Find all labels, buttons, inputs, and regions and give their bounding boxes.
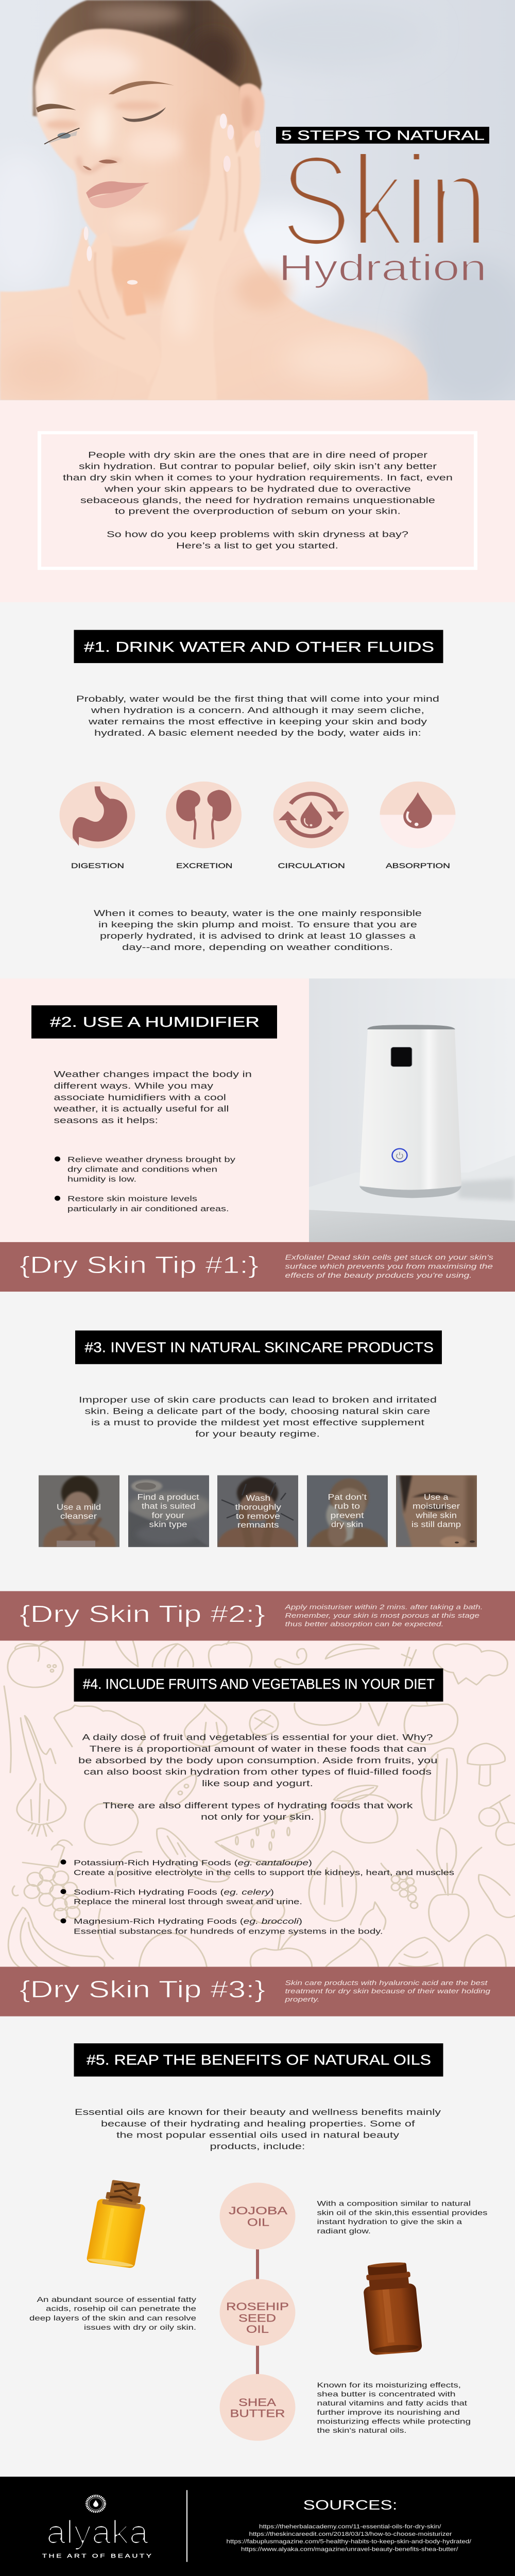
neck and shoulders <box>0 229 428 400</box>
card: find a product: for your <box>151 1511 185 1520</box>
circle: jojoba oil <box>219 2183 296 2249</box>
text: shea description: Known for its moisturizing effects, <box>317 2381 461 2389</box>
text: water intro: Probably, water would be the first thing that will come into your mind <box>76 694 439 704</box>
card: pat don't rub: Pat don’t <box>328 1493 367 1502</box>
intro text: So how do you keep problems with skin dryness at bay? <box>107 530 408 539</box>
hair <box>31 0 263 117</box>
text: jojoba description <box>317 2199 487 2235</box>
callout: dry skin tip 1: {Dry Skin Tip #1:} <box>20 1251 259 1278</box>
intro text: sebaceous glands, the need for hydration remains unquestionable <box>80 496 435 505</box>
text: daily dose <box>78 1733 438 1822</box>
text: daily dose: A daily dose of fruit and vegetables is essential for your diet. Why? <box>82 1733 433 1742</box>
card: use a moisturiser: while skin <box>415 1511 457 1520</box>
card: find a product: that is suited <box>142 1502 196 1511</box>
sources heading: SOURCES: <box>303 2497 398 2512</box>
text: rosehip description: issues with dry or oily skin. <box>84 2324 196 2332</box>
list: humidifier benefits: Restore skin moisture levels <box>67 1195 197 1203</box>
lips <box>86 181 149 198</box>
text: improper use <box>79 1395 437 1438</box>
circle: shea butter <box>219 2374 296 2441</box>
icon: digestion stomach <box>60 782 135 849</box>
circle: jojoba oil: JOJOBA <box>229 2205 288 2216</box>
text: rosehip description: deep layers of the skin and can resolve <box>29 2314 196 2323</box>
text: jojoba description: radiant glow. <box>317 2227 371 2235</box>
intro text: when your skin appears to be hydrated due to overactive <box>104 484 411 494</box>
text: essential oils: the most popular essential oils used in natural beauty <box>116 2130 399 2140</box>
text: water and beauty: properly hydrated, it is advised to drink at least 10 glasses a <box>100 931 416 941</box>
circle: shea butter: SHEA <box>238 2396 277 2409</box>
text: daily dose: There are also different types of hydrating foods that work <box>102 1801 413 1810</box>
text: weather changes: associate humidifiers with a cool <box>54 1093 226 1102</box>
callout: dry skin tip 3 <box>0 1967 515 2016</box>
circle: rosehip seed oil <box>219 2279 296 2346</box>
text: weather changes: different ways. While you may <box>54 1081 213 1091</box>
card: pat don't rub <box>307 1475 388 1547</box>
text: water intro: hydrated. A basic element needed by the body, water aids in: <box>94 728 421 738</box>
ear <box>239 82 266 143</box>
text: weather changes <box>53 1070 252 1125</box>
label: excretion: EXCRETION <box>176 862 233 870</box>
icon: absorption <box>380 782 455 849</box>
text: improper use: is a must to provide the mildest yet most effective supplement <box>91 1417 424 1427</box>
text: daily dose: be absorbed by the body upon consumption. Aside from fruits, you <box>78 1755 438 1765</box>
text: daily dose: can also boost skin hydration from other types of fluid-filled foods <box>83 1767 432 1776</box>
card: find a product <box>128 1475 211 1547</box>
card: use a moisturiser: is still damp <box>411 1520 461 1529</box>
text: shea description <box>317 2381 471 2435</box>
hero label: 5 steps to natural <box>276 127 489 144</box>
callout: dry skin tip 2: Apply moisturiser within 2 mins. after taking a bath. <box>284 1603 483 1611</box>
text: jojoba description: skin oil of the skin,this essential provides <box>317 2209 488 2217</box>
text: essential oils: Essential oils are known for their beauty and wellness benefits mainly <box>75 2107 441 2117</box>
intro text: to prevent the overproduction of sebum on your skin. <box>115 506 401 516</box>
callout: dry skin tip 2 <box>0 1591 515 1641</box>
text: essential oils: products, include: <box>210 2142 305 2151</box>
card: pat don't rub: prevent <box>331 1511 364 1520</box>
text: water intro: water remains the most effective in keeping your skin and body <box>88 717 427 726</box>
callout: dry skin tip 1: Exfoliate! Dead skin cells get stuck on your skin's <box>285 1253 494 1262</box>
intro text <box>63 450 453 550</box>
sources list: https://theherbalacademy.com/11-essential-oils-for-dry-skin/ <box>259 2523 441 2530</box>
photo: yellow oil bottle with cork <box>86 2178 150 2268</box>
card: wash thoroughly <box>217 1475 298 1547</box>
list: hydrating foods: Sodium-Rich Hydrating Foods ( eg. celery ) <box>74 1889 274 1896</box>
callout: dry skin tip 3: treatment for dry skin because of their water holding <box>285 1987 490 1995</box>
text: essential oils <box>75 2107 441 2151</box>
sources list: https://www.alyaka.com/magazine/unravel-beauty-benefits-shea-butter/ <box>241 2546 458 2552</box>
heading: step 4 <box>74 1668 443 1702</box>
callout: dry skin tip 2: {Dry Skin Tip #2:} <box>20 1600 265 1628</box>
text: water and beauty: day--and more, depending on weather conditions. <box>122 942 393 952</box>
callout: dry skin tip 1: surface which prevents you from maximising the <box>285 1262 493 1270</box>
circle: jojoba oil: OIL <box>247 2216 269 2228</box>
list: hydrating foods: Magnesium-Rich Hydrating Foods ( eg. broccoli ) <box>74 1918 302 1926</box>
list: humidifier benefits: particularly in air conditioned areas. <box>67 1205 229 1213</box>
text: weather changes: seasons as it helps: <box>54 1115 158 1125</box>
panel: intro <box>0 400 515 602</box>
text: water intro: when hydration is a concern. And although it may seem cliche, <box>91 705 424 715</box>
circle: rosehip seed oil: OIL <box>246 2323 269 2335</box>
eyes <box>122 107 166 122</box>
label: absorption: ABSORPTION <box>386 862 450 870</box>
heading: step 5 <box>74 2043 443 2077</box>
icon: excretion kidneys <box>166 782 242 849</box>
callout: dry skin tip 3: {Dry Skin Tip #3:} <box>20 1976 265 2003</box>
text: water and beauty: When it comes to beauty, water is the one mainly responsible <box>94 908 422 918</box>
title: Hydration: Hydration <box>279 247 487 289</box>
text: daily dose: not only for your skin. <box>201 1812 314 1822</box>
heading: step 1 <box>74 630 443 663</box>
text: water and beauty <box>94 908 422 952</box>
card: pat don't rub: rub to <box>334 1502 360 1511</box>
text: rosehip description: An abundant source of essential fatty <box>37 2296 197 2304</box>
list: humidifier benefits: humidity is low. <box>67 1175 136 1183</box>
card: wash thoroughly: Wash <box>246 1494 270 1503</box>
list: hydrating foods: Potassium-Rich Hydrating Foods ( eg. cantaloupe ) <box>74 1859 312 1867</box>
photo: amber glass bottle <box>361 2261 422 2355</box>
card: wash thoroughly: remnants <box>237 1521 279 1530</box>
callout: dry skin tip 2: thus better absorption can be expected. <box>285 1620 443 1628</box>
text: weather changes: weather, it is actually useful for all <box>53 1104 229 1113</box>
text: shea description: the skin's natural oils. <box>317 2427 406 2435</box>
list: humidifier benefits: dry climate and conditions when <box>67 1165 217 1174</box>
card: find a product: skin type <box>149 1520 187 1529</box>
right hand <box>165 114 261 305</box>
text: improper use: Improper use of skin care products can lead to broken and irritated <box>79 1395 437 1404</box>
hero label: 5 steps to natural: 5 STEPS TO NATURAL <box>281 128 485 143</box>
left hand <box>68 228 118 298</box>
sources list: https://fabuplusmagazine.com/5-healthy-habits-to-keep-skin-and-body-hydrated/ <box>227 2538 472 2545</box>
card: wash thoroughly: to remove <box>236 1512 280 1521</box>
card: use a mild cleanser: Use a mild <box>57 1503 101 1512</box>
text: shea description: further improve its nourishing and <box>317 2409 460 2417</box>
callout: dry skin tip 2: Remember, your skin is most porous at this stage <box>285 1612 479 1619</box>
text: jojoba description: instant hydration to give the skin a <box>317 2218 462 2226</box>
text: weather changes: Weather changes impact the body in <box>54 1070 252 1079</box>
text: daily dose: There is a proportional amount of water in these foods that can <box>90 1744 426 1754</box>
icon: alyaka logo mark <box>87 2496 105 2512</box>
card: pat don't rub: dry skin <box>331 1520 363 1529</box>
logo wordmark: alyaka <box>46 2514 149 2551</box>
logo tagline: THE ART OF BEAUTY <box>42 2553 153 2560</box>
text: water intro <box>76 694 439 738</box>
face <box>36 29 243 247</box>
text: essential oils: because of their hydrating and healing properties. Some of <box>101 2119 415 2128</box>
card: use a moisturiser <box>396 1475 477 1548</box>
text: daily dose: like soup and yogurt. <box>202 1778 313 1788</box>
list: hydrating foods <box>61 1859 454 1936</box>
list: hydrating foods: Create a positive electrolyte in the cells to support the kidneys, heart, and muscles <box>74 1869 454 1877</box>
text: jojoba description: With a composition similar to natural <box>317 2199 471 2208</box>
oil connector lines <box>256 2249 259 2375</box>
card: use a moisturiser: Use a <box>424 1493 449 1502</box>
callout: dry skin tip 3: Skin care products with hyaluronic acid are the best <box>285 1979 488 1987</box>
text: rosehip description: acids, rosehip oil can penetrate the <box>46 2305 196 2313</box>
card: use a mild cleanser <box>39 1475 119 1547</box>
card: use a mild cleanser: cleanser <box>60 1512 97 1521</box>
hero photo: woman touching face <box>0 0 515 409</box>
intro text: skin hydration. But contrar to popular belief, oily skin isn’t any better <box>79 461 437 471</box>
label: circulation: CIRCULATION <box>278 862 345 870</box>
photo: humidifier <box>309 978 515 1242</box>
eyebrows <box>108 81 174 94</box>
circle: shea butter: BUTTER <box>230 2408 285 2419</box>
footer <box>0 2477 515 2576</box>
heading: step 5: #5. REAP THE BENEFITS OF NATURAL OILS <box>87 2053 431 2068</box>
text: rosehip description <box>29 2296 197 2332</box>
text: improper use: skin. Being a delicate part of the body, choosing natural skin care <box>84 1406 431 1416</box>
callout: dry skin tip 3: property. <box>284 1995 319 2003</box>
heading: step 4: #4. INCLUDE FRUITS AND VEGETABLES IN YOUR DIET <box>83 1677 435 1692</box>
panel: fruits and vegetables background <box>0 1641 515 1970</box>
heading: step 3: #3. INVEST IN NATURAL SKINCARE PRODUCTS <box>84 1340 434 1355</box>
nose <box>79 157 119 172</box>
card: find a product: Find a product <box>137 1493 199 1502</box>
text: shea description: shea butter is concentrated with <box>317 2390 455 2398</box>
heading: step 3 <box>75 1330 442 1364</box>
text: shea description: moisturizing effects while protecting <box>317 2417 471 2426</box>
list: hydrating foods: Essential substances for hundreds of enzyme systems in the body. <box>74 1927 383 1936</box>
card: use a moisturiser: moisturiser <box>413 1502 460 1511</box>
sources list <box>227 2523 472 2552</box>
intro text: Here’s a list to get you started. <box>176 541 338 550</box>
circle: rosehip seed oil: ROSEHIP <box>226 2300 289 2313</box>
label: digestion: DIGESTION <box>71 862 124 870</box>
intro text: than dry skin when it comes to your hydration requirements. In fact, even <box>63 472 453 482</box>
heading: step 2: #2. USE A HUMIDIFIER <box>50 1014 260 1030</box>
panel: humidifier left background <box>0 978 309 1242</box>
intro text: People with dry skin are the ones that are in dire need of proper <box>88 450 427 460</box>
list: hydrating foods: Replace the mineral lost through sweat and urine. <box>74 1898 302 1906</box>
callout: dry skin tip 1: effects of the beauty products you're using. <box>285 1272 472 1280</box>
text: shea description: natural vitamins and fatty acids that <box>317 2399 468 2408</box>
callout: dry skin tip 1 <box>0 1242 515 1292</box>
sources list: https://theskincareedit.com/2018/03/13/how-to-choose-moisturizer <box>249 2531 452 2537</box>
list: humidifier benefits: Relieve weather dryness brought by <box>67 1156 235 1164</box>
text: improper use: for your beauty regime. <box>195 1429 320 1438</box>
text: water and beauty: in keeping the skin plump and moist. To ensure that you are <box>98 920 417 929</box>
circle: rosehip seed oil: SEED <box>238 2312 276 2324</box>
icon: circulation <box>273 782 349 849</box>
heading: step 2 <box>31 1005 277 1039</box>
list: humidifier benefits <box>55 1156 235 1213</box>
card: wash thoroughly: thoroughly <box>235 1503 282 1512</box>
heading: step 1: #1. DRINK WATER AND OTHER FLUIDS <box>84 640 434 655</box>
